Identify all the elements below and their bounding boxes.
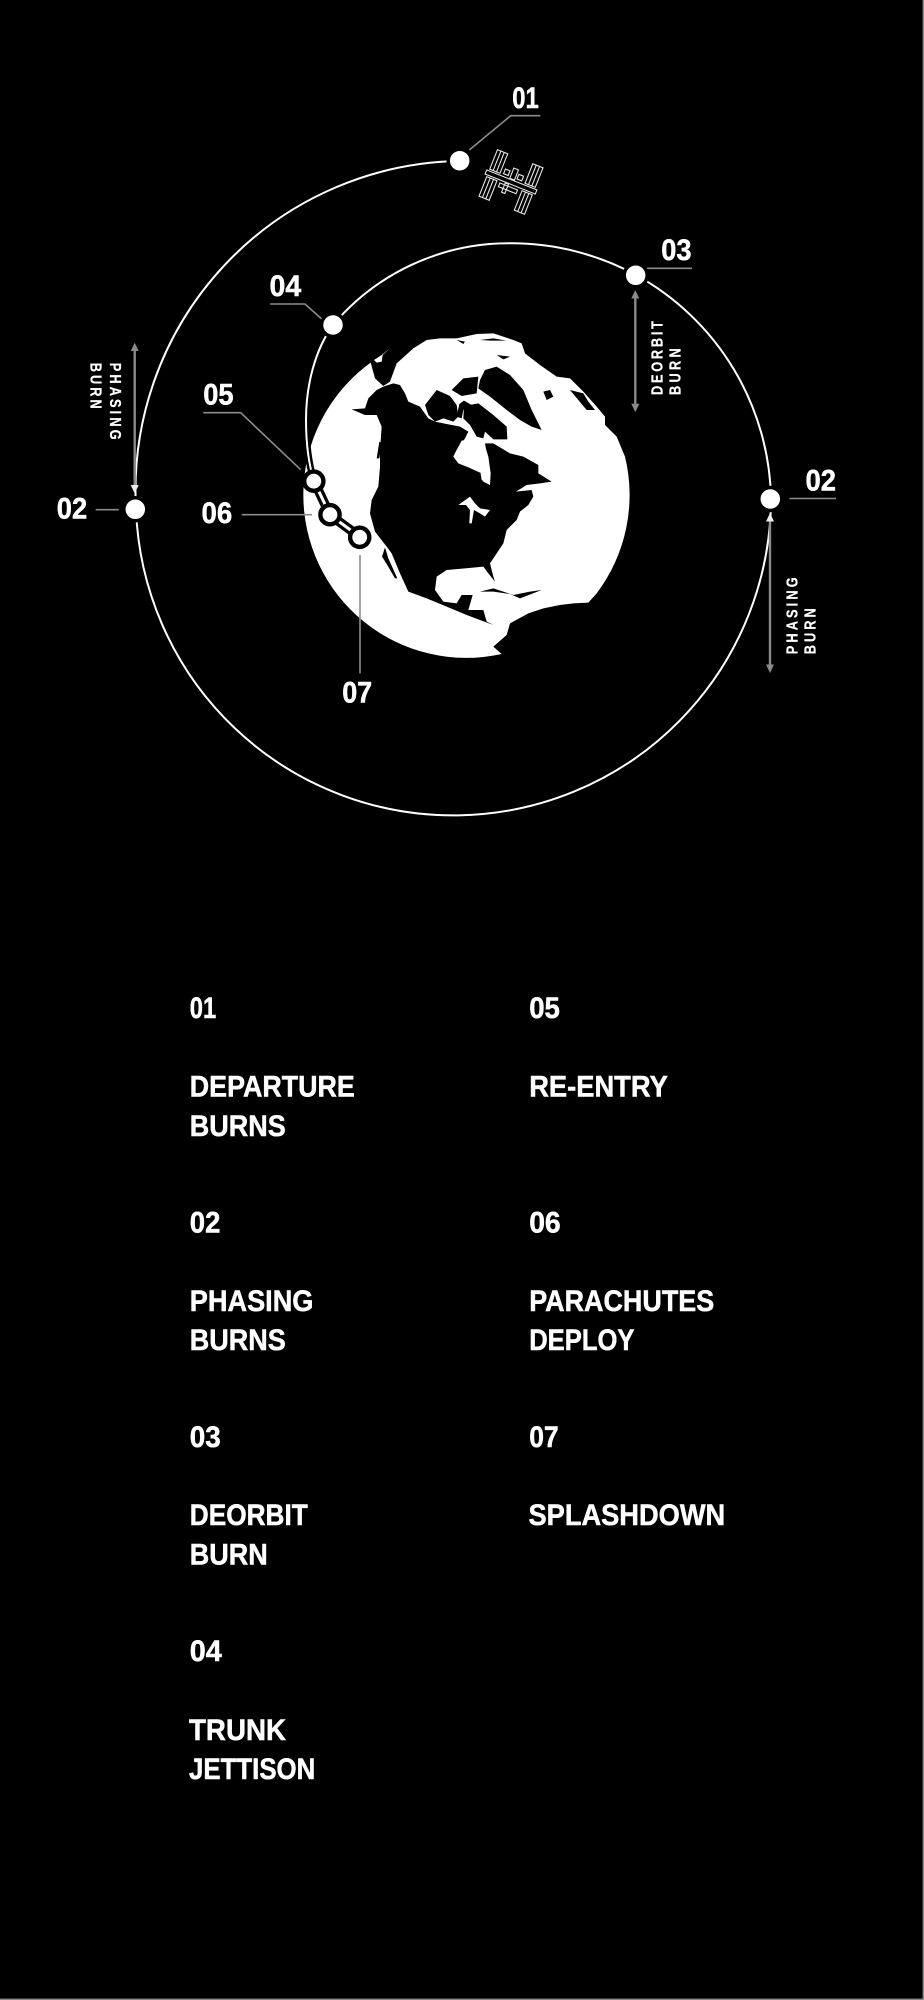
marker 02 left <box>57 492 147 526</box>
label: right phasing burn: BURN <box>802 608 820 654</box>
marker 02 left: 02 <box>57 492 87 525</box>
legend item 02: phasing burns: PHASING <box>190 1285 313 1318</box>
legend item 07: splashdown: SPLASHDOWN <box>528 1499 725 1532</box>
arrow: left phasing burn <box>131 343 139 494</box>
legend item 04: trunk jettison: TRUNK <box>189 1714 286 1747</box>
label: right phasing burn: PHASING <box>784 577 802 654</box>
legend item 03: deorbit burn: DEORBIT <box>190 1499 308 1532</box>
marker 07: 07 <box>342 676 372 709</box>
marker 01: 01 <box>512 82 539 115</box>
legend item 05: re-entry: RE-ENTRY <box>529 1071 668 1104</box>
legend item 06: parachutes deploy <box>529 1206 714 1357</box>
orbit path <box>135 161 771 815</box>
legend item 03: deorbit burn: BURN <box>190 1539 268 1572</box>
legend item 07: splashdown: 07 <box>529 1421 559 1454</box>
marker 02 right <box>759 465 836 510</box>
label: deorbit burn: DEORBIT <box>649 321 667 395</box>
label: deorbit burn: BURN <box>667 348 685 395</box>
marker 06 <box>202 497 340 530</box>
legend item 01: departure burns: 01 <box>190 992 216 1025</box>
globe <box>303 333 630 658</box>
legend item 02: phasing burns <box>190 1206 313 1357</box>
legend item 03: deorbit burn <box>190 1421 308 1572</box>
legend item 04: trunk jettison <box>189 1635 315 1786</box>
legend item 04: trunk jettison: JETTISON <box>189 1753 315 1786</box>
marker 04: 04 <box>270 270 301 303</box>
marker 02 right: 02 <box>806 465 836 498</box>
arrow: right phasing burn <box>766 513 774 673</box>
legend item 02: phasing burns: BURNS <box>190 1324 286 1357</box>
label: right phasing burn <box>784 577 820 654</box>
legend item 06: parachutes deploy: 06 <box>529 1207 561 1240</box>
legend item 02: phasing burns: 02 <box>190 1207 220 1240</box>
marker 05: 05 <box>203 378 234 411</box>
legend item 06: parachutes deploy: PARACHUTES <box>529 1285 714 1318</box>
legend item 05: re-entry <box>529 992 668 1104</box>
marker 06: 06 <box>202 497 232 530</box>
marker 04 <box>270 270 344 336</box>
legend item 03: deorbit burn: 03 <box>190 1421 221 1454</box>
marker 03 <box>624 234 692 287</box>
legend item 06: parachutes deploy: DEPLOY <box>529 1324 634 1357</box>
marker 05 <box>203 378 323 491</box>
arrow: deorbit burn <box>631 290 639 412</box>
label: left phasing burn: BURN <box>86 363 104 409</box>
marker 07 <box>342 528 372 710</box>
label: deorbit burn <box>649 321 685 395</box>
marker 01 <box>448 82 540 172</box>
legend item 01: departure burns: DEPARTURE <box>190 1071 355 1104</box>
label: left phasing burn: PHASING <box>106 363 123 440</box>
legend item 05: re-entry: 05 <box>529 992 560 1025</box>
legend item 04: trunk jettison: 04 <box>190 1635 222 1668</box>
marker 03: 03 <box>661 234 692 267</box>
label: left phasing burn <box>86 363 123 440</box>
legend item 07: splashdown <box>528 1421 725 1532</box>
legend item 01: departure burns <box>190 992 355 1143</box>
icon: space station <box>477 149 545 215</box>
legend item 01: departure burns: BURNS <box>190 1110 286 1143</box>
